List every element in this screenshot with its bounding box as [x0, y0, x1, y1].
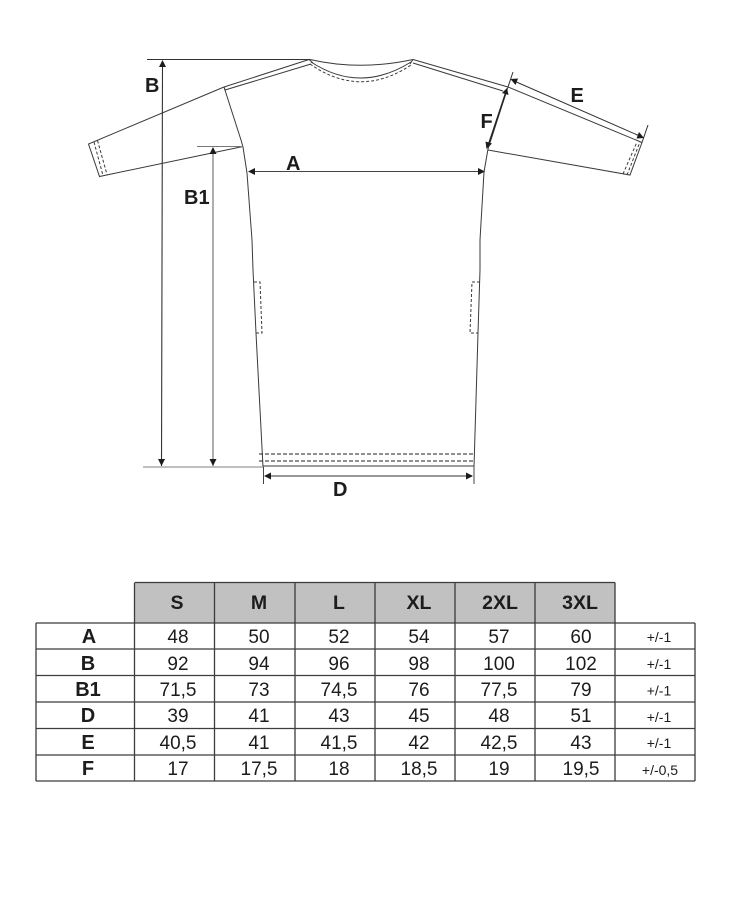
row F: +/-0,5 — [642, 762, 678, 778]
table header: sizes: XL — [407, 592, 432, 614]
row F: 19,5 — [563, 759, 599, 780]
row D: D — [81, 705, 95, 727]
row B: 102 — [565, 654, 597, 675]
row D: 43 — [328, 706, 350, 727]
row A: 52 — [328, 627, 350, 648]
row D: 48 — [488, 706, 510, 727]
table header: sizes: 2XL — [482, 592, 518, 614]
right sleeve — [488, 142, 642, 175]
row A — [82, 626, 671, 648]
measurement D — [264, 466, 474, 501]
measurement D: D — [333, 479, 347, 501]
row A: 50 — [248, 627, 270, 648]
baseline — [143, 466, 263, 468]
row F: 18,5 — [401, 759, 437, 780]
row A: A — [82, 626, 96, 648]
row B: 92 — [167, 654, 189, 675]
row D: 45 — [408, 706, 430, 727]
shoulder seams — [224, 60, 642, 142]
hem — [259, 454, 474, 466]
row B: B — [81, 653, 95, 675]
row A: +/-1 — [647, 629, 671, 645]
row E — [81, 732, 671, 754]
row B: 98 — [408, 654, 430, 675]
row B1: 74,5 — [321, 680, 357, 701]
row F: 19 — [488, 759, 510, 780]
row F: 18 — [328, 759, 350, 780]
row B: +/-1 — [647, 656, 671, 672]
table header: sizes: M — [251, 592, 267, 614]
measurement E: E — [570, 85, 584, 107]
measurement F: F — [480, 111, 493, 133]
row E: 41,5 — [321, 733, 357, 754]
measurement B1 — [184, 146, 243, 466]
row B1: 79 — [570, 680, 592, 701]
row A: 57 — [488, 627, 510, 648]
size table — [36, 582, 695, 781]
pockets — [254, 282, 480, 333]
row F: 17 — [167, 759, 189, 780]
row B1: 71,5 — [160, 680, 196, 701]
row B — [81, 653, 671, 675]
row D: +/-1 — [647, 709, 671, 725]
table header: sizes — [135, 582, 615, 623]
table grid — [36, 582, 695, 781]
row E: E — [81, 732, 95, 754]
row E: 42,5 — [481, 733, 517, 754]
measurement F — [480, 88, 508, 149]
row A: 54 — [408, 627, 430, 648]
measurement A: A — [286, 153, 300, 175]
body sides — [224, 87, 508, 467]
row F — [82, 758, 678, 780]
measurement B — [145, 60, 310, 466]
row E: 41 — [248, 733, 270, 754]
row B1: B1 — [75, 679, 101, 701]
row D: 39 — [167, 706, 189, 727]
row E: 40,5 — [160, 733, 196, 754]
measurement A — [248, 153, 485, 175]
row A: 60 — [570, 627, 592, 648]
table header: sizes: L — [333, 592, 345, 614]
row B1 — [75, 679, 671, 701]
row D — [81, 705, 671, 727]
garment outline drawing — [88, 60, 642, 467]
row B1: 77,5 — [481, 680, 517, 701]
neckline — [310, 60, 413, 82]
row B1: 73 — [248, 680, 270, 701]
row B: 96 — [328, 654, 350, 675]
row E: 43 — [570, 733, 592, 754]
row B1: +/-1 — [647, 682, 671, 698]
row F: F — [82, 758, 94, 780]
row B: 100 — [483, 654, 515, 675]
table header: sizes: S — [170, 592, 184, 614]
row E: +/-1 — [647, 735, 671, 751]
row D: 41 — [248, 706, 270, 727]
measurement E — [508, 72, 648, 142]
row F: 17,5 — [241, 759, 277, 780]
table header: sizes: 3XL — [562, 592, 598, 614]
row B1: 76 — [408, 680, 430, 701]
measurement B1: B1 — [184, 187, 210, 209]
left sleeve — [88, 87, 243, 176]
row E: 42 — [408, 733, 430, 754]
row A: 48 — [167, 627, 189, 648]
row B: 94 — [248, 654, 270, 675]
row D: 51 — [570, 706, 592, 727]
measurement B: B — [145, 75, 159, 97]
